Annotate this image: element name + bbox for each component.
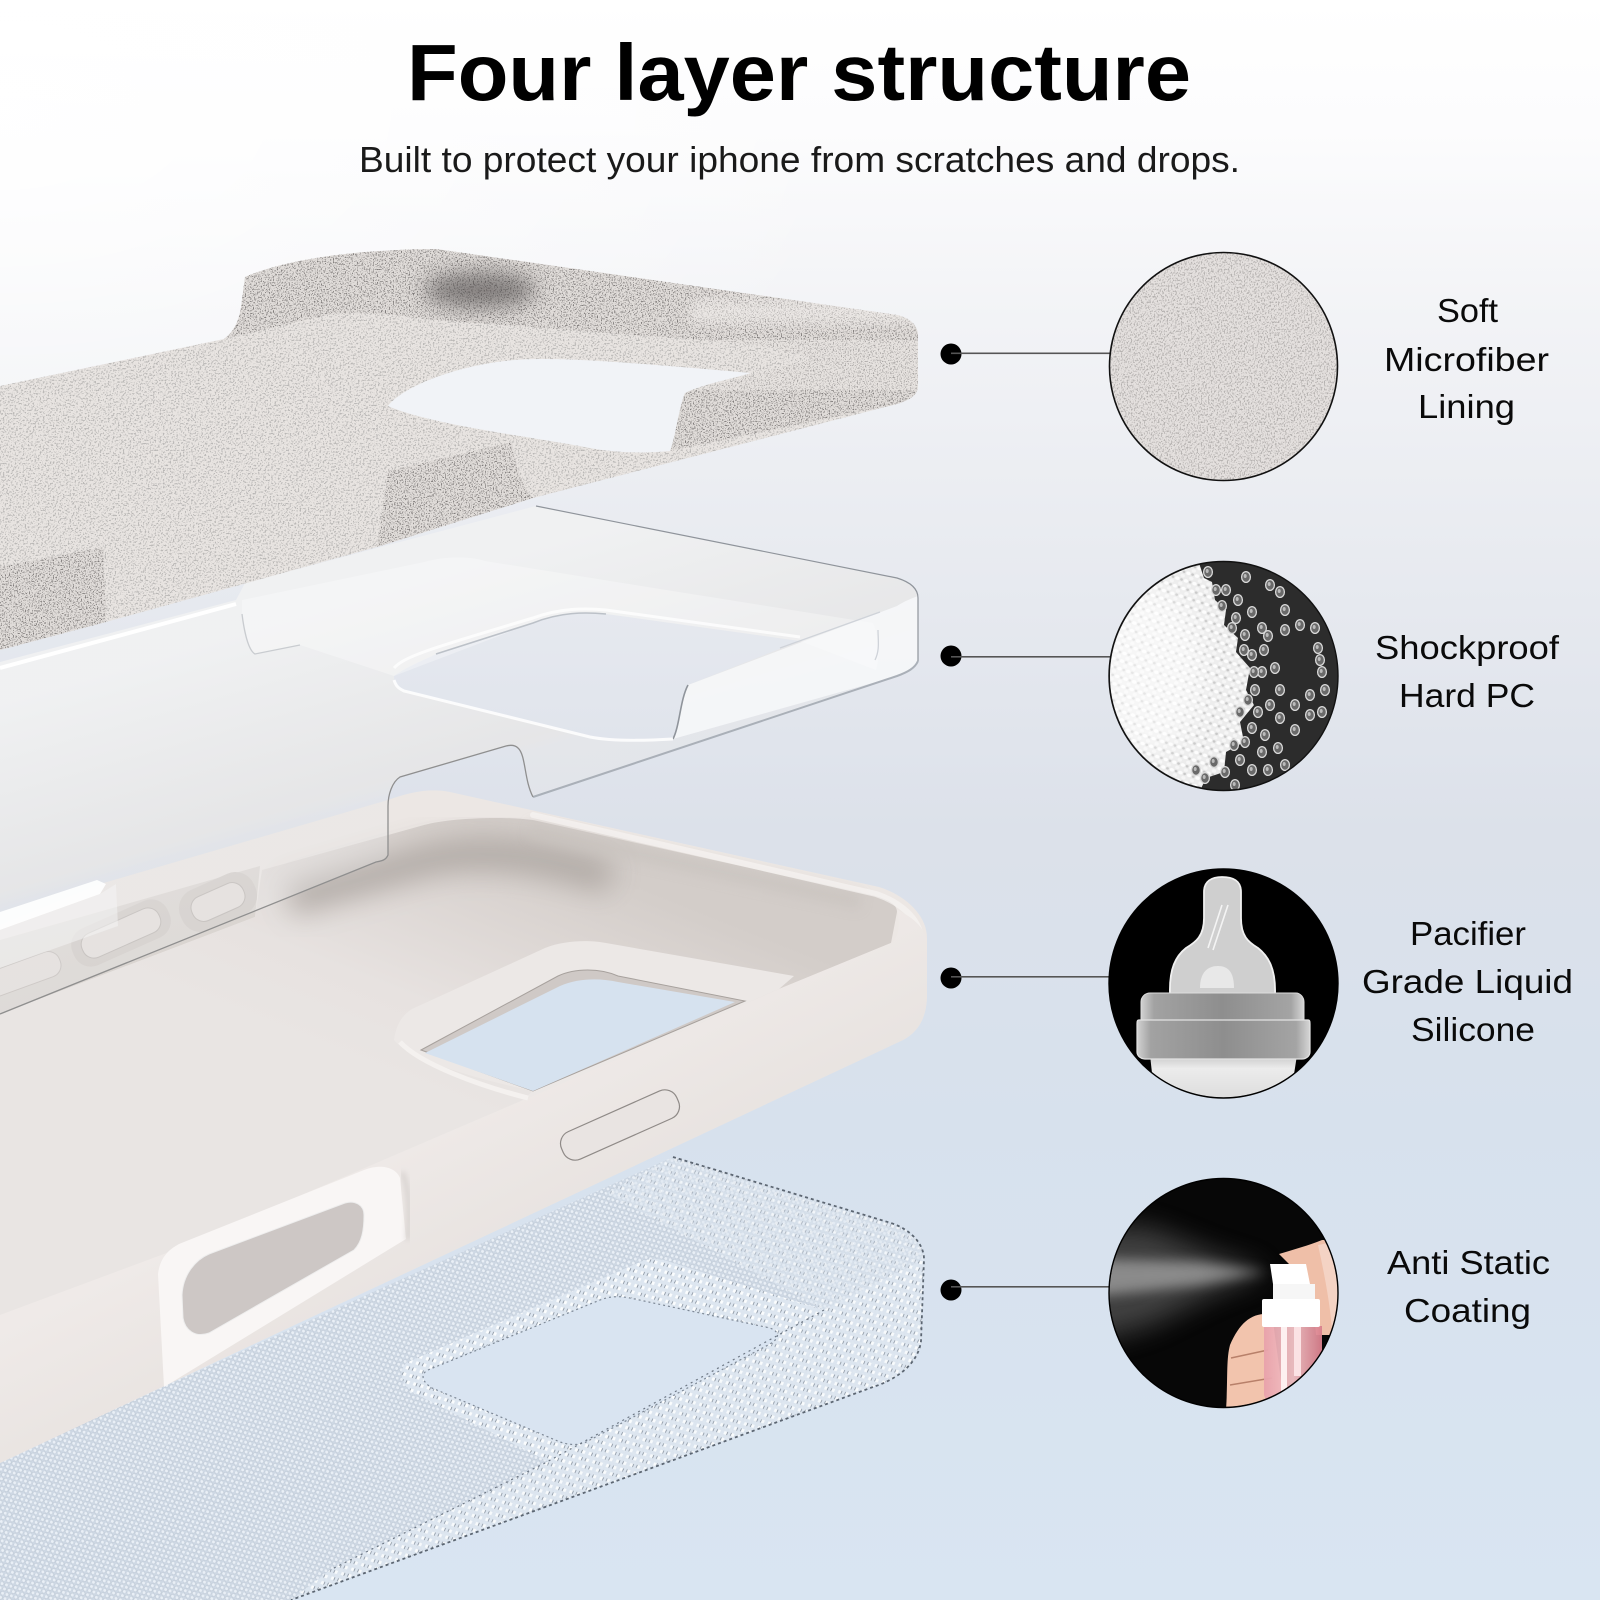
clear shell outlines [0, 506, 918, 1014]
microfiber walls [0, 240, 930, 660]
title: Four layer structure [407, 28, 1191, 117]
callout connector 3 [940, 968, 1110, 988]
layer 1: soft microfiber lining [0, 240, 930, 660]
dot 2 [940, 646, 962, 666]
label: Shockproof Hard PC: Hard PC [1399, 677, 1535, 714]
line 2 [951, 656, 1110, 658]
layer 4: anti static dotted TPU layer [0, 1157, 924, 1600]
layer 4 camera ring [402, 1259, 830, 1467]
clear shell recess highlight [242, 557, 879, 676]
label: Anti Static Coating [1387, 1244, 1550, 1329]
dot 1 [940, 344, 962, 364]
icon: PC pellets swatch [1098, 560, 1338, 795]
lower fingers [1226, 1314, 1285, 1410]
icon: microfiber swatch [1105, 248, 1345, 488]
silicone front wall [0, 910, 927, 1463]
icon: anti static spray [1108, 1178, 1339, 1408]
clear shell right wall [673, 596, 918, 739]
silicone interior floor [0, 818, 897, 1315]
layer 4 inner rim edge [330, 1310, 824, 1570]
label: Soft Microfiber Lining [1384, 292, 1549, 425]
nipple teat [1170, 877, 1275, 995]
dot 3 [940, 968, 962, 988]
callout connector 4 [940, 1280, 1110, 1300]
subtitle: Built to protect your iphone from scratches and drops. [359, 139, 1240, 180]
charging port surround [158, 1167, 406, 1387]
bottle body [1150, 1060, 1296, 1098]
label: Soft Microfiber Lining: Soft [1437, 292, 1498, 329]
label: Soft Microfiber Lining: Microfiber [1384, 341, 1549, 378]
microfiber camera opening [388, 359, 751, 452]
callout connector 2 [940, 646, 1110, 666]
silicone camera opening [425, 979, 735, 1091]
microfiber floor [0, 240, 930, 660]
callout connector 1 [940, 344, 1110, 364]
layer 4 front rim wall [291, 1259, 924, 1600]
label: Pacifier Grade Liquid Silicone: Pacifier [1410, 915, 1526, 952]
silicone shell outer body [0, 790, 927, 1463]
pump cap [1270, 1264, 1310, 1284]
upper finger and palm [1279, 1240, 1338, 1335]
layer 4 camera opening [423, 1297, 778, 1444]
label: Shockproof Hard PC [1375, 629, 1560, 714]
label: Pacifier Grade Liquid Silicone: Silicone [1411, 1011, 1535, 1048]
silicone camera ring [394, 941, 794, 1101]
silicone camera bevel [421, 970, 745, 1091]
icon: silicone baby bottle nipple [1109, 869, 1338, 1100]
silicone button band [0, 866, 260, 1014]
line 1 [951, 352, 1110, 354]
charging port opening [182, 1202, 364, 1335]
dot 4 [940, 1280, 962, 1300]
side button [556, 1086, 684, 1164]
silicone rim highlight [533, 815, 921, 938]
label: Soft Microfiber Lining: Lining [1418, 388, 1515, 425]
label: Pacifier Grade Liquid Silicone: Grade Liquid [1362, 963, 1573, 1000]
layer 3: pacifier grade liquid silicone shell [0, 790, 927, 1463]
layer 2: shockproof hard PC clear shell [0, 506, 918, 1014]
volume buttons [0, 866, 263, 1001]
collar lower [1137, 1020, 1310, 1059]
label: Shockproof Hard PC: Shockproof [1375, 629, 1560, 666]
scattered pellets [1192, 567, 1329, 790]
collar upper [1141, 993, 1304, 1022]
layer 4 outer edge [291, 1157, 924, 1600]
silicone interior shadow [290, 830, 860, 902]
white pellet pile [1110, 565, 1254, 788]
clear shell left wall reflection [0, 880, 106, 930]
bottle [1264, 1326, 1322, 1398]
line 4 [951, 1286, 1110, 1288]
label: Anti Static Coating: Coating [1404, 1292, 1531, 1329]
line 3 [951, 976, 1110, 978]
layer 4 top rim wall [606, 1157, 924, 1310]
label: Anti Static Coating: Anti Static [1387, 1244, 1550, 1281]
spray mist [1110, 1215, 1262, 1346]
label: Pacifier Grade Liquid Silicone [1362, 915, 1573, 1048]
